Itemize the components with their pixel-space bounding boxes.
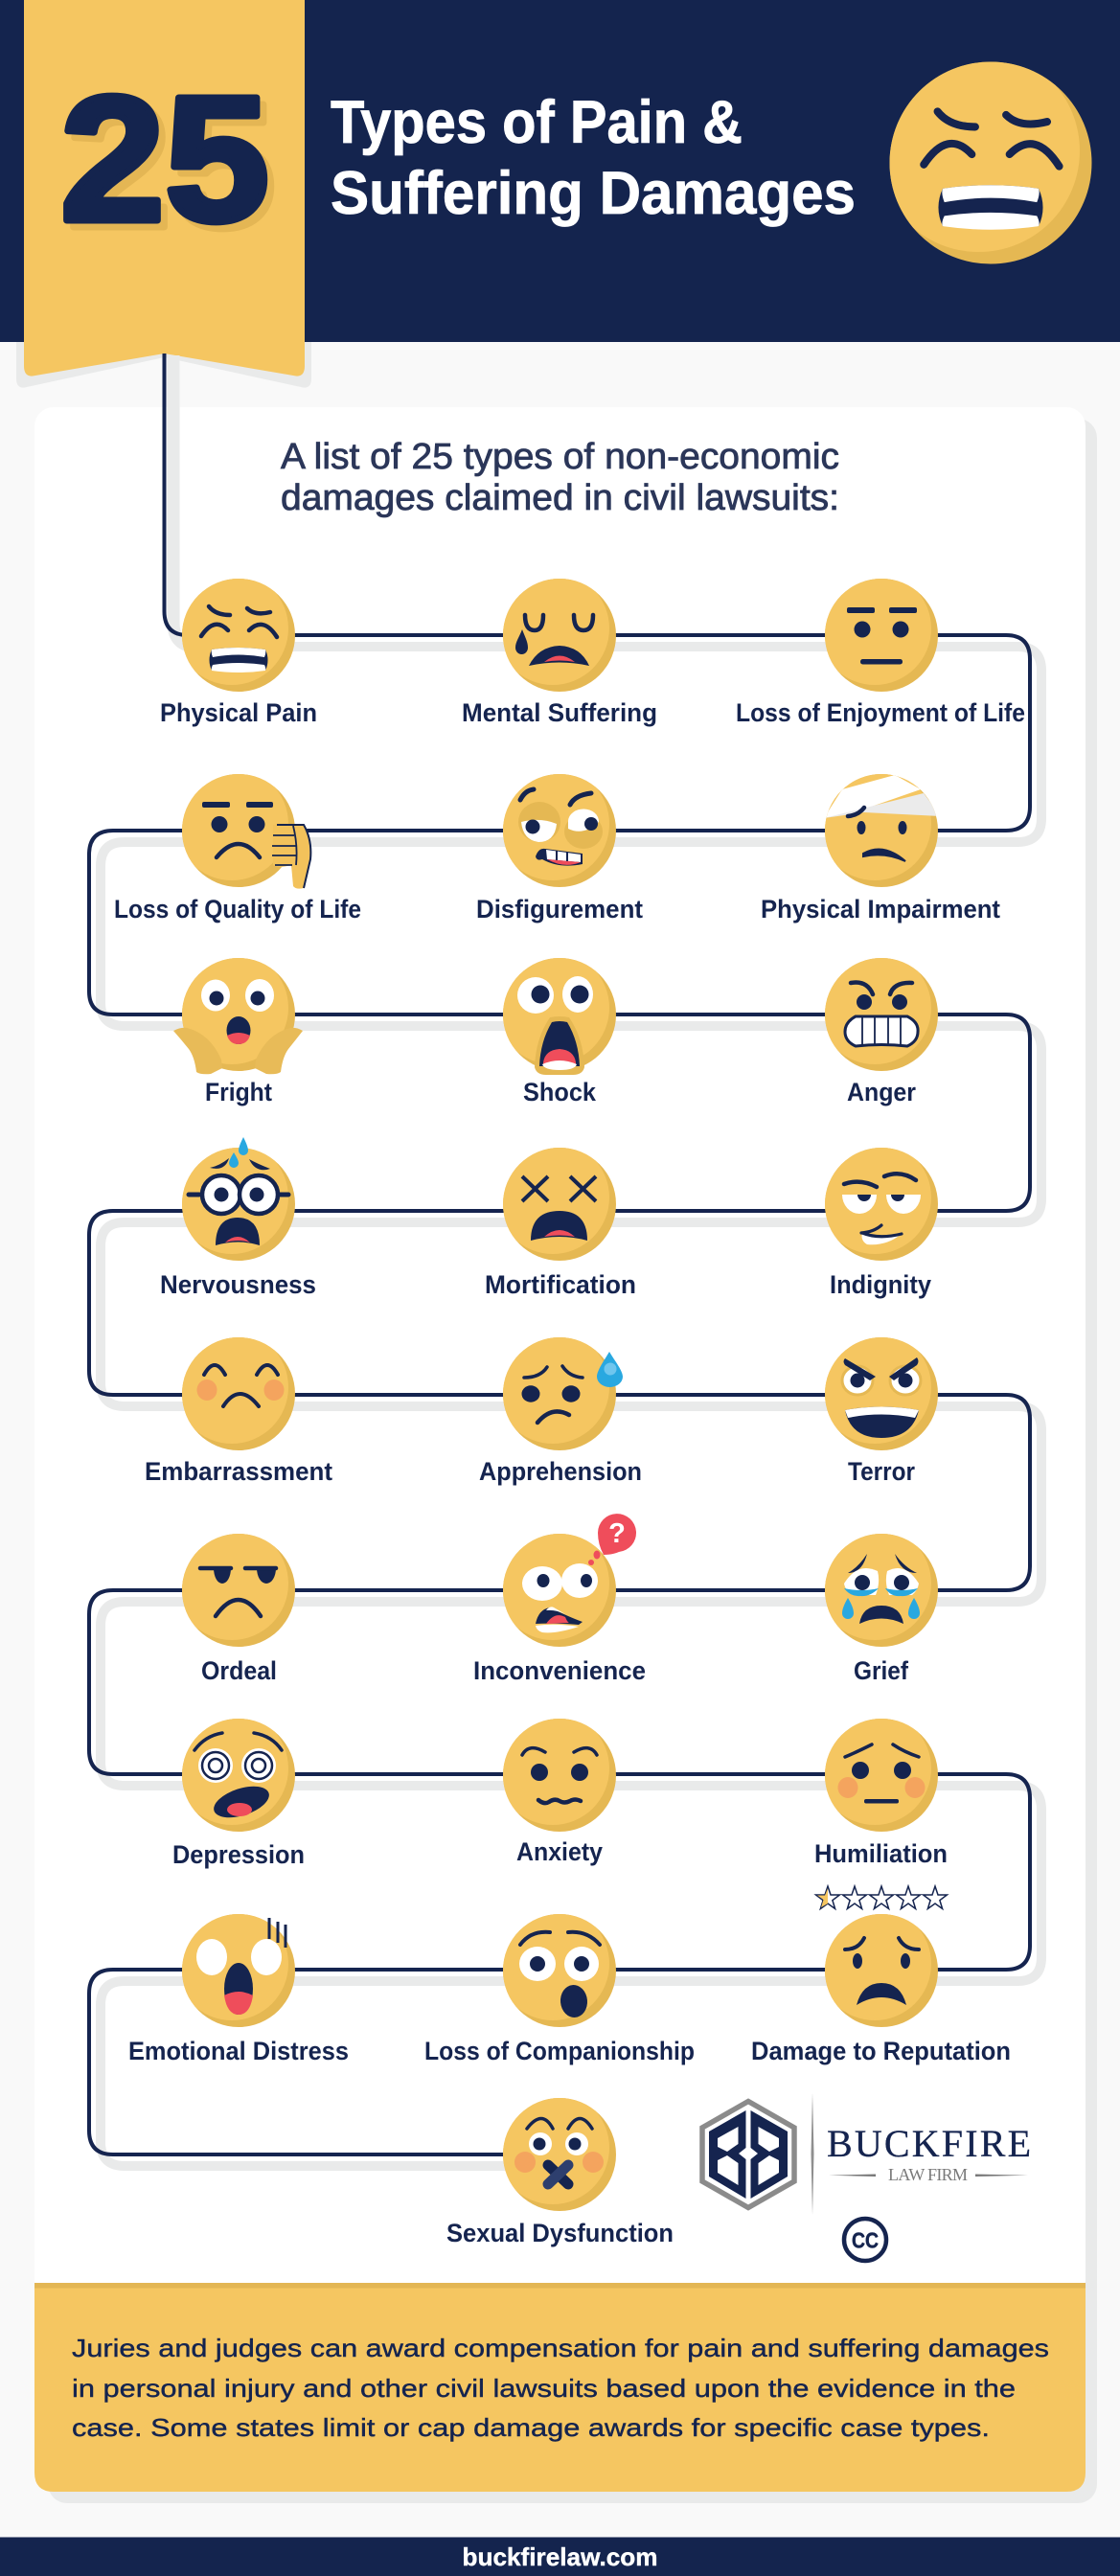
item: Depression: Depression [172, 1840, 305, 1869]
icon: header pain face [878, 50, 1091, 263]
item: Mental Suffering [462, 572, 657, 727]
item: Damage to Reputation [751, 1886, 1011, 2065]
summary text [72, 2334, 1049, 2442]
icon: ordeal face [175, 1527, 295, 1647]
item: Sexual Dysfunction [446, 2091, 674, 2247]
title [331, 89, 856, 227]
item: Anxiety [496, 1712, 616, 1866]
item: Depression [172, 1712, 305, 1869]
item: Nervousness [160, 1137, 316, 1299]
item: Emotional Distress [128, 1907, 349, 2065]
number 25: 25 [60, 60, 269, 259]
item: Anger [818, 951, 938, 1106]
intro text: damages claimed in civil lawsuits: [281, 478, 839, 518]
item: Fright [173, 951, 303, 1106]
footer bar: buckfirelaw.com [462, 2542, 657, 2571]
logo tagline: LAW FIRM [888, 2165, 968, 2184]
icon: shocked face [496, 951, 616, 1075]
icon: bandaged face [825, 774, 938, 887]
icon: embarrassed face [175, 1331, 295, 1450]
item: Loss of Quality of Life: Loss of Quality of Life [114, 895, 361, 923]
item: Mortification [485, 1141, 636, 1299]
icon: frightened face with hands [173, 951, 303, 1074]
item: Physical Impairment: Physical Impairment [761, 895, 1000, 923]
icon: hexagon mark [702, 2102, 794, 2207]
icon: taped mouth face [496, 2091, 616, 2211]
item: Anxiety: Anxiety [516, 1837, 603, 1866]
item: Emotional Distress: Emotional Distress [128, 2037, 349, 2065]
connector line [89, 353, 1030, 2154]
number 25: 25 [67, 67, 276, 265]
icon: crying face [818, 1527, 938, 1647]
icon: stunned face [175, 1907, 295, 2027]
title: Types of Pain & [331, 89, 743, 156]
icon: confused face with question bubble: ? [608, 1518, 626, 1549]
item: Loss of Enjoyment of Life [736, 572, 1025, 727]
item: Shock: Shock [523, 1078, 597, 1106]
item: Inconvenience: Inconvenience [473, 1656, 646, 1685]
item: Grief: Grief [854, 1656, 909, 1685]
item: Physical Pain: Physical Pain [160, 698, 317, 727]
intro text [281, 437, 839, 518]
item: Fright: Fright [205, 1078, 272, 1106]
icon: dizzy face [175, 1712, 295, 1832]
item: Sexual Dysfunction: Sexual Dysfunction [446, 2219, 674, 2247]
item: Mental Suffering: Mental Suffering [462, 698, 657, 727]
item: Inconvenience [473, 1514, 646, 1685]
icon: mortified face [496, 1141, 616, 1261]
connector shadow [101, 355, 1041, 2166]
logo wordmark: BUCKFIRE [827, 2122, 1031, 2165]
icon: humiliated face [818, 1712, 938, 1832]
icon: sad face [818, 1907, 938, 2027]
icon: mental suffering face [496, 572, 616, 692]
item: Humiliation [814, 1712, 948, 1868]
ribbon shadow [16, 342, 311, 388]
item: Disfigurement: Disfigurement [476, 895, 643, 923]
ribbon [24, 0, 305, 376]
summary text: Juries and judges can award compensation for pain and suffering damages [72, 2334, 1049, 2362]
item: Apprehension [479, 1331, 642, 1486]
item: Loss of Companionship [424, 1907, 695, 2065]
item: Loss of Enjoyment of Life: Loss of Enjoyment of Life [736, 698, 1025, 727]
item: Loss of Quality of Life [114, 767, 361, 923]
footer bar [0, 2537, 1120, 2576]
item: Anger: Anger [847, 1078, 916, 1106]
item: Shock [496, 951, 616, 1106]
icon: creative commons badge [844, 2219, 886, 2261]
header band [0, 0, 1120, 342]
item: Physical Impairment [761, 767, 1000, 923]
item: Mortification: Mortification [485, 1270, 636, 1299]
item: Terror: Terror [848, 1457, 915, 1486]
summary text: in personal injury and other civil lawsuits based upon the evidence in the [72, 2374, 1016, 2403]
item: Loss of Companionship: Loss of Companionship [424, 2037, 695, 2065]
icon: disfigured face [496, 767, 616, 887]
icon: anxious face [496, 1712, 616, 1832]
item: Nervousness: Nervousness [160, 1270, 316, 1299]
icon: physical pain face [175, 572, 295, 692]
item: Disfigurement [476, 767, 643, 923]
icon: terrified grin face [818, 1331, 938, 1450]
logo: Buckfire Law Firm [702, 2093, 1031, 2215]
item: Humiliation: Humiliation [814, 1839, 948, 1868]
icon: one star rating [816, 1886, 947, 1908]
icon: thumbs down face [175, 767, 310, 889]
item: Embarrassment [145, 1331, 332, 1486]
intro text: A list of 25 types of non-economic [281, 437, 839, 477]
item: Apprehension: Apprehension [479, 1457, 642, 1486]
title: Suffering Damages [331, 160, 856, 227]
main card [34, 407, 1097, 2503]
item: Indignity: Indignity [830, 1270, 931, 1299]
item: Damage to Reputation: Damage to Reputation [751, 2037, 1011, 2065]
item: Ordeal [175, 1527, 295, 1685]
icon: angry face [818, 951, 938, 1071]
icon: creative commons badge: CC [852, 2228, 879, 2253]
icon: apprehensive face with sweat drop [496, 1331, 623, 1450]
item: Embarrassment: Embarrassment [145, 1457, 332, 1486]
item: Ordeal: Ordeal [201, 1656, 277, 1685]
icon: neutral face [818, 572, 938, 692]
icon: indignant face [818, 1141, 938, 1261]
item: Indignity [818, 1141, 938, 1299]
panel: summary [34, 2283, 1086, 2492]
item: Physical Pain [160, 572, 317, 727]
icon: surprised face [496, 1907, 616, 2027]
icon: nervous face with glasses [175, 1137, 295, 1261]
item: Terror [818, 1331, 938, 1486]
summary text: case. Some states limit or cap damage awards for specific case types. [72, 2413, 990, 2442]
icon: confused face with question bubble [496, 1514, 636, 1647]
item: Grief [818, 1527, 938, 1685]
